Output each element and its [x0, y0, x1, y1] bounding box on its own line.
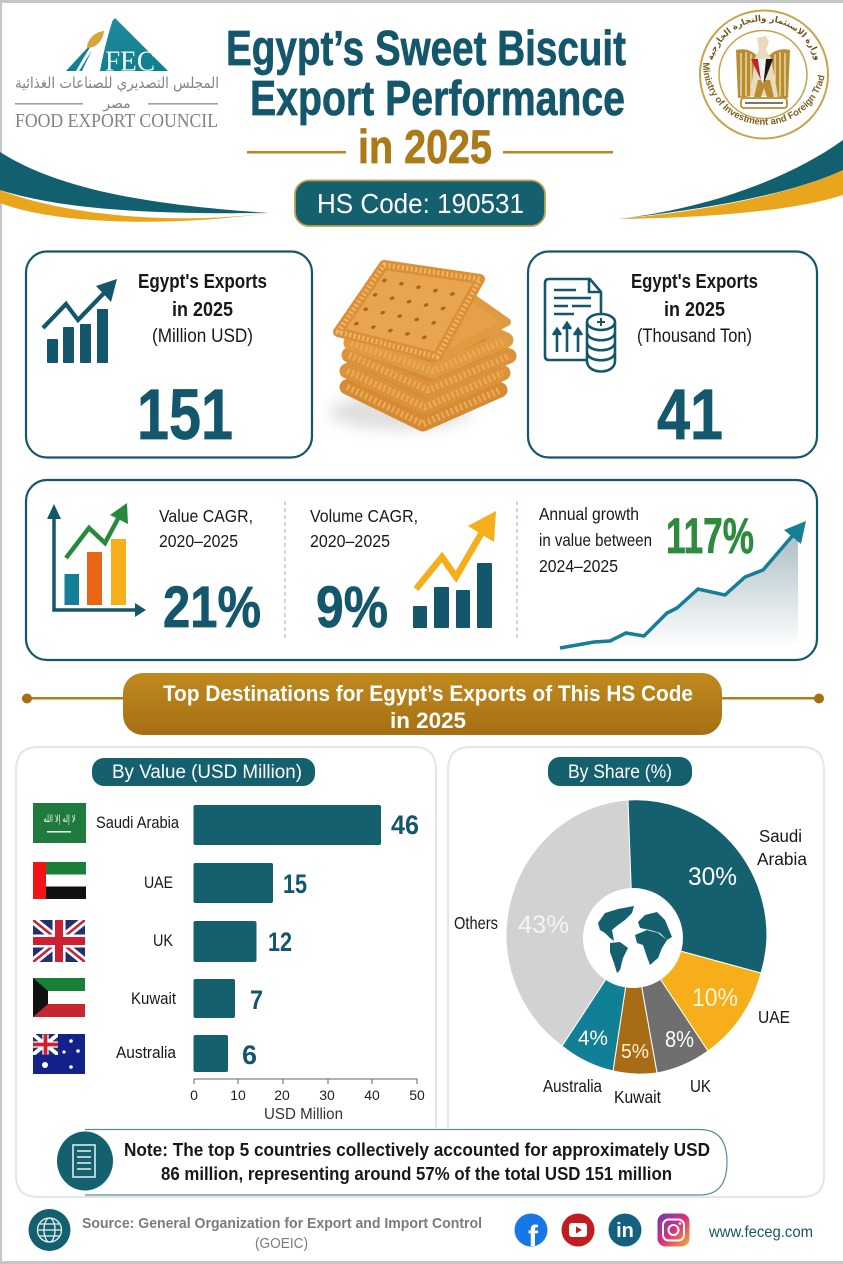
icon: note document	[57, 1132, 113, 1190]
label: exports in thousand ton: in 2025	[664, 299, 725, 321]
country labels: Australia	[543, 1076, 602, 1096]
icon: FEC triangle: FEC	[105, 46, 155, 78]
logo: Food Export Council	[15, 18, 219, 132]
badge: HS code: HS Code: 190531	[317, 188, 524, 219]
metric: volume CAGR: Volume CAGR,	[310, 506, 418, 526]
row: UAE: 15	[283, 869, 307, 899]
country labels: Others	[454, 913, 498, 933]
seal: ministry emblem	[699, 10, 829, 140]
logo Arabic country: مصر	[102, 96, 131, 112]
icon: YouTube	[562, 1214, 594, 1246]
icon: rising bars	[43, 279, 117, 363]
panel: exports volume	[528, 252, 817, 458]
note text: Note: The top 5 countries collectively accounted for approximately USD	[124, 1139, 710, 1160]
logo Arabic name: المجلس التصديري للصناعات الغذائية	[15, 74, 219, 93]
website: www.feceg.com	[708, 1224, 813, 1241]
row: Australia	[116, 1035, 257, 1072]
icon: LinkedIn: in	[616, 1220, 634, 1242]
pie chart: share by country	[454, 800, 807, 1107]
flag: UK	[33, 920, 85, 962]
value: 151: 151	[137, 376, 233, 455]
label: exports in thousand ton: Egypt's Exports	[631, 271, 758, 293]
section banner: top destinations: in 2025	[390, 708, 466, 733]
biscuit layers	[347, 305, 509, 424]
row: Saudi Arabia: 46	[391, 810, 419, 840]
country labels: UAE	[758, 1007, 790, 1027]
axis	[190, 1079, 425, 1123]
metric: annual growth: in value between	[539, 530, 652, 550]
bar chart: value by country	[96, 805, 425, 1123]
axis: 30	[319, 1087, 335, 1103]
label: exports in million USD: in 2025	[172, 299, 233, 321]
panel: growth metrics	[26, 480, 817, 660]
axis: 0	[190, 1087, 198, 1103]
panel: charts outline	[16, 747, 824, 1197]
pie labels: 8%	[665, 1026, 694, 1052]
icon: eagle	[736, 36, 790, 108]
metric: value CAGR: 2020–2025	[159, 531, 238, 551]
metric: annual growth	[539, 504, 754, 576]
metric: volume CAGR: 2020–2025	[310, 531, 390, 551]
panel: by value	[33, 758, 425, 1123]
icon: FEC triangle	[66, 18, 168, 78]
note text	[124, 1139, 710, 1184]
icon: Facebook: f	[528, 1220, 539, 1253]
pie labels: 30%	[688, 863, 737, 891]
panel: by share	[454, 757, 807, 1107]
header swoosh: left	[0, 152, 269, 222]
label: exports in thousand ton: (Thousand Ton)	[637, 326, 752, 347]
row: Kuwait: Kuwait	[131, 990, 176, 1008]
logo English name: FOOD EXPORT COUNCIL	[15, 110, 218, 132]
pie labels	[518, 863, 738, 1063]
country labels: Kuwait	[614, 1087, 661, 1107]
axis: USD Million	[264, 1106, 343, 1123]
icon: web globe	[28, 1209, 70, 1251]
icon: Instagram	[658, 1214, 690, 1246]
badge: HS code	[295, 180, 545, 226]
icon: volume chart	[413, 511, 496, 628]
title	[226, 22, 626, 173]
chart: growth line	[560, 521, 806, 648]
source text	[82, 1215, 482, 1252]
title: Export Performance	[250, 72, 625, 126]
row: Kuwait	[131, 979, 263, 1018]
country labels: UK	[690, 1076, 711, 1096]
country labels: Saudi	[759, 826, 802, 846]
row: UK	[153, 921, 292, 962]
row: Kuwait: 7	[250, 985, 263, 1015]
axis: 20	[274, 1087, 290, 1103]
note text: 86 million, representing around 57% of the total USD 151 million	[161, 1163, 672, 1184]
flag: Kuwait	[33, 978, 85, 1017]
axis: 50	[409, 1087, 425, 1103]
icon: world globe	[583, 888, 683, 988]
header swoosh: right	[618, 140, 843, 219]
panel: exports value	[26, 252, 312, 458]
row: Australia: Australia	[116, 1044, 177, 1062]
metric: volume CAGR: 9%	[316, 575, 388, 640]
metric: value CAGR	[159, 506, 261, 640]
row: Saudi Arabia: Saudi Arabia	[96, 814, 180, 832]
label: exports in million USD: (Million USD)	[152, 326, 253, 347]
axis: 40	[364, 1087, 380, 1103]
subtitle year: in 2025	[358, 120, 492, 173]
metric: annual growth: 117%	[666, 508, 754, 564]
row: UAE: UAE	[144, 874, 173, 892]
label: exports in million USD: Egypt's Exports	[138, 271, 267, 293]
value: 41: 41	[657, 376, 723, 455]
image: biscuit stack	[330, 265, 509, 430]
row: UK: 12	[268, 927, 292, 957]
section banner: top destinations	[22, 673, 824, 735]
row: Australia: 6	[242, 1040, 257, 1070]
heading: by value: By Value (USD Million)	[112, 761, 302, 783]
section banner: top destinations: Top Destinations for Egypt’s Exports of This HS Code	[163, 681, 693, 706]
row: UK: UK	[153, 932, 173, 950]
metric: value CAGR: 21%	[163, 575, 261, 640]
note callout	[57, 1130, 727, 1195]
flag: Australia	[33, 1034, 85, 1074]
row: Saudi Arabia	[96, 805, 419, 845]
source text: Source: General Organization for Export and Import Control	[82, 1215, 482, 1232]
pie labels: 5%	[621, 1041, 649, 1063]
heading: by share: By Share (%)	[568, 761, 672, 783]
country labels: Arabia	[757, 849, 807, 869]
icon: document and coins	[545, 279, 615, 372]
icon: value chart	[47, 503, 146, 617]
pie labels: 43%	[518, 911, 569, 939]
seal: ministry emblem: وزارة الاستثمار والتجارة الخارجية	[708, 14, 818, 60]
axis: 10	[230, 1087, 246, 1103]
label: exports in thousand ton	[631, 271, 758, 347]
country labels	[454, 826, 807, 1107]
metric: value CAGR: Value CAGR,	[159, 506, 253, 526]
title: Egypt’s Sweet Biscuit	[226, 22, 626, 76]
flag: Saudi Arabia: لا إله إلا الله	[44, 814, 76, 825]
icon: LinkedIn	[608, 1214, 642, 1246]
metric: annual growth: 2024–2025	[539, 556, 618, 576]
heading: by value	[92, 758, 315, 786]
flag: Saudi Arabia	[33, 803, 86, 843]
label: exports in million USD	[138, 271, 267, 347]
pie labels: 4%	[578, 1027, 608, 1050]
heading: by share	[548, 757, 692, 786]
metric: volume CAGR	[310, 506, 418, 640]
footer	[28, 1209, 813, 1253]
icon: Facebook	[514, 1214, 548, 1253]
flag: UAE	[33, 862, 86, 899]
metric: annual growth: Annual growth	[539, 504, 639, 524]
pie labels: 10%	[692, 984, 738, 1012]
source text: (GOEIC)	[255, 1235, 308, 1252]
row: UAE	[144, 863, 307, 903]
